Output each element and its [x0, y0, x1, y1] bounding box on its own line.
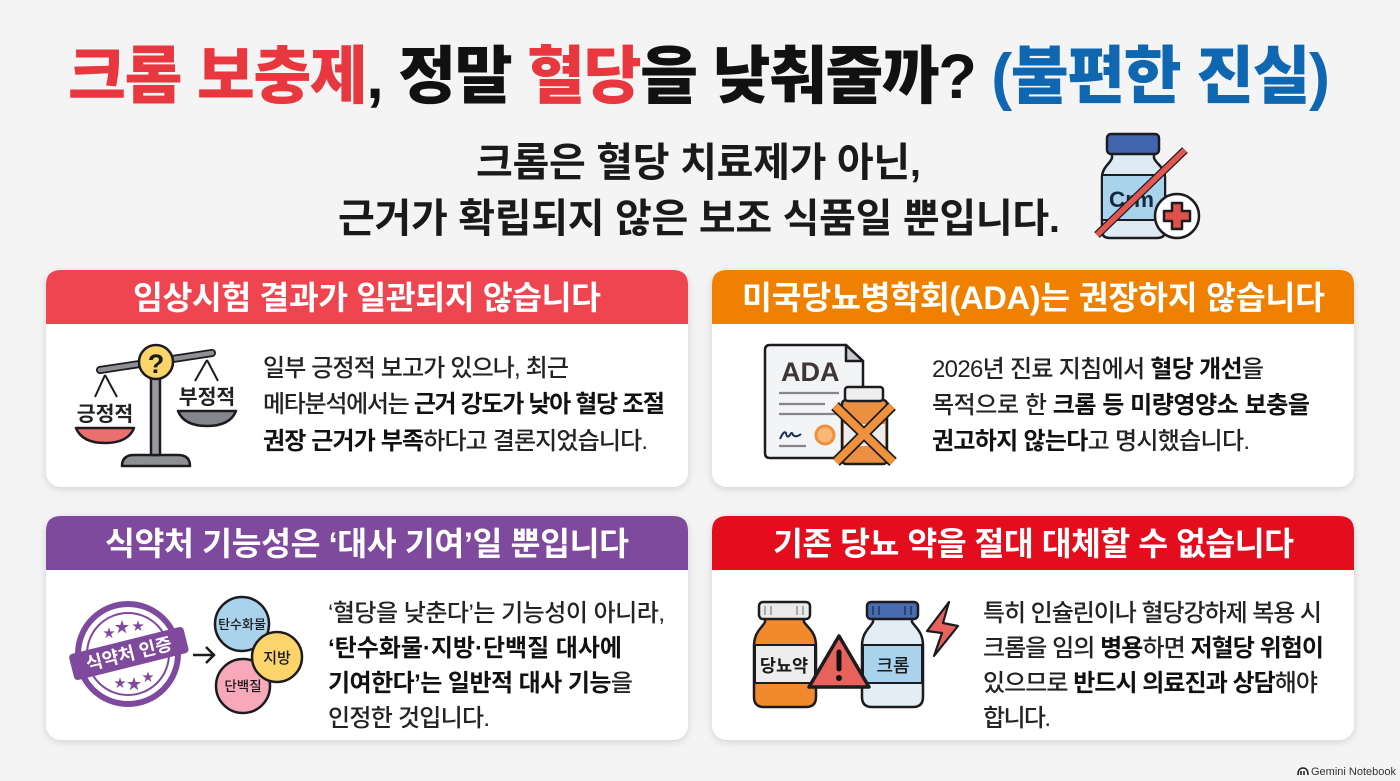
subtitle: 근거가 확립되지 않은 보조 식품일 뿐입니다. — [338, 197, 1060, 241]
panel header: clinical trials: 임상시험 결과가 일관되지 않습니다 — [133, 280, 601, 316]
icon: balance scale: ? — [148, 349, 164, 379]
text: ADA: 권고하지 않는다고 명시했습니다. — [932, 428, 1250, 455]
arrow — [193, 647, 214, 663]
text: do not replace medication — [983, 600, 1324, 732]
icon: crossed-out chromium bottle: Crm — [1109, 187, 1154, 212]
icon: balance scale: 긍정적 — [77, 403, 133, 426]
icon: balance scale — [76, 345, 236, 466]
watermark: Gemini Notebook — [1311, 766, 1396, 778]
text: do not replace medication: 있으므로 반드시 의료진과 상담해야 — [983, 670, 1318, 697]
text: do not replace medication: 크롬을 임의 병용하면 저혈당 위험이 — [983, 635, 1324, 662]
icon: medication bottles with warning: 크롬 — [876, 656, 910, 676]
panel header: MFDS: 식약처 기능성은 ‘대사 기여’일 뿐입니다 — [105, 526, 629, 562]
icon: nutrient circles: 탄수화물 — [218, 617, 266, 632]
text: clinical trials: 메타분석에서는 근거 강도가 낮아 혈당 조절 — [263, 391, 665, 418]
icon: MFDS certification stamp: 식약처 인증 — [84, 634, 174, 674]
text: clinical trials: 일부 긍정적 보고가 있으나, 최근 — [263, 355, 569, 382]
panel: MFDS — [46, 516, 688, 740]
icon: medication bottles with warning — [754, 602, 958, 707]
panel header: do not replace medication: 기존 당뇨 약을 절대 대체할 수 없습니다 — [773, 526, 1294, 562]
icon: balance scale: 부정적 — [179, 386, 235, 409]
icon: MFDS certification stamp: ★ — [103, 626, 115, 640]
icon: ADA document with crossed bottle — [765, 345, 893, 464]
text: do not replace medication: 특히 인슐린이나 혈당강하제 복용 시 — [983, 600, 1322, 627]
subtitle: 크롬은 혈당 치료제가 아닌, — [476, 141, 921, 185]
icon: ADA document with crossed bottle: ADA — [781, 357, 840, 387]
text: MFDS: ‘혈당을 낮춘다’는 기능성이 아니라, — [328, 600, 665, 627]
title: 크롬 보충제, 정말 혈당을 낮춰줄까? (불편한 진실) — [68, 42, 1330, 112]
panel: ADA — [712, 270, 1354, 487]
panel header: clinical trials — [46, 270, 688, 324]
panel: clinical trials — [46, 270, 688, 487]
panel header: ADA: 미국당뇨병학회(ADA)는 권장하지 않습니다 — [742, 280, 1325, 316]
subtitle — [338, 141, 1060, 241]
text: MFDS: 기여한다’는 일반적 대사 기능을 — [328, 670, 633, 697]
text: MFDS: 인정한 것입니다. — [328, 705, 490, 732]
icon: MFDS certification stamp — [68, 604, 189, 704]
panel: do not replace medication — [712, 516, 1354, 740]
text: do not replace medication: 합니다. — [983, 705, 1051, 732]
text: ADA: 2026년 진료 지침에서 혈당 개선을 — [932, 356, 1264, 383]
icon: nutrient circles — [215, 597, 302, 713]
icon: medication bottles with warning: 당뇨약 — [760, 656, 808, 676]
text: MFDS — [328, 600, 665, 732]
panel header: do not replace medication — [712, 516, 1354, 570]
text: ADA: 목적으로 한 크롬 등 미량영양소 보충을 — [932, 392, 1310, 419]
panel header: MFDS — [46, 516, 688, 570]
icon: MFDS certification stamp: ★ — [114, 676, 126, 690]
text: clinical trials — [263, 355, 665, 455]
icon: MFDS certification stamp: ★ — [132, 619, 144, 633]
text: ADA — [932, 356, 1310, 455]
icon: crossed-out chromium bottle — [1097, 134, 1199, 238]
text: MFDS: ‘탄수화물·지방·단백질 대사에 — [328, 635, 622, 662]
icon: MFDS certification stamp: ★ — [126, 676, 142, 693]
icon: MFDS certification stamp: ★ — [114, 619, 130, 636]
panel header: ADA — [712, 270, 1354, 324]
text: clinical trials: 권장 근거가 부족하다고 결론지었습니다. — [263, 428, 648, 455]
icon: nutrient circles: 지방 — [263, 650, 291, 667]
icon: nutrient circles: 단백질 — [224, 679, 262, 694]
icon: MFDS certification stamp: ★ — [142, 670, 154, 684]
